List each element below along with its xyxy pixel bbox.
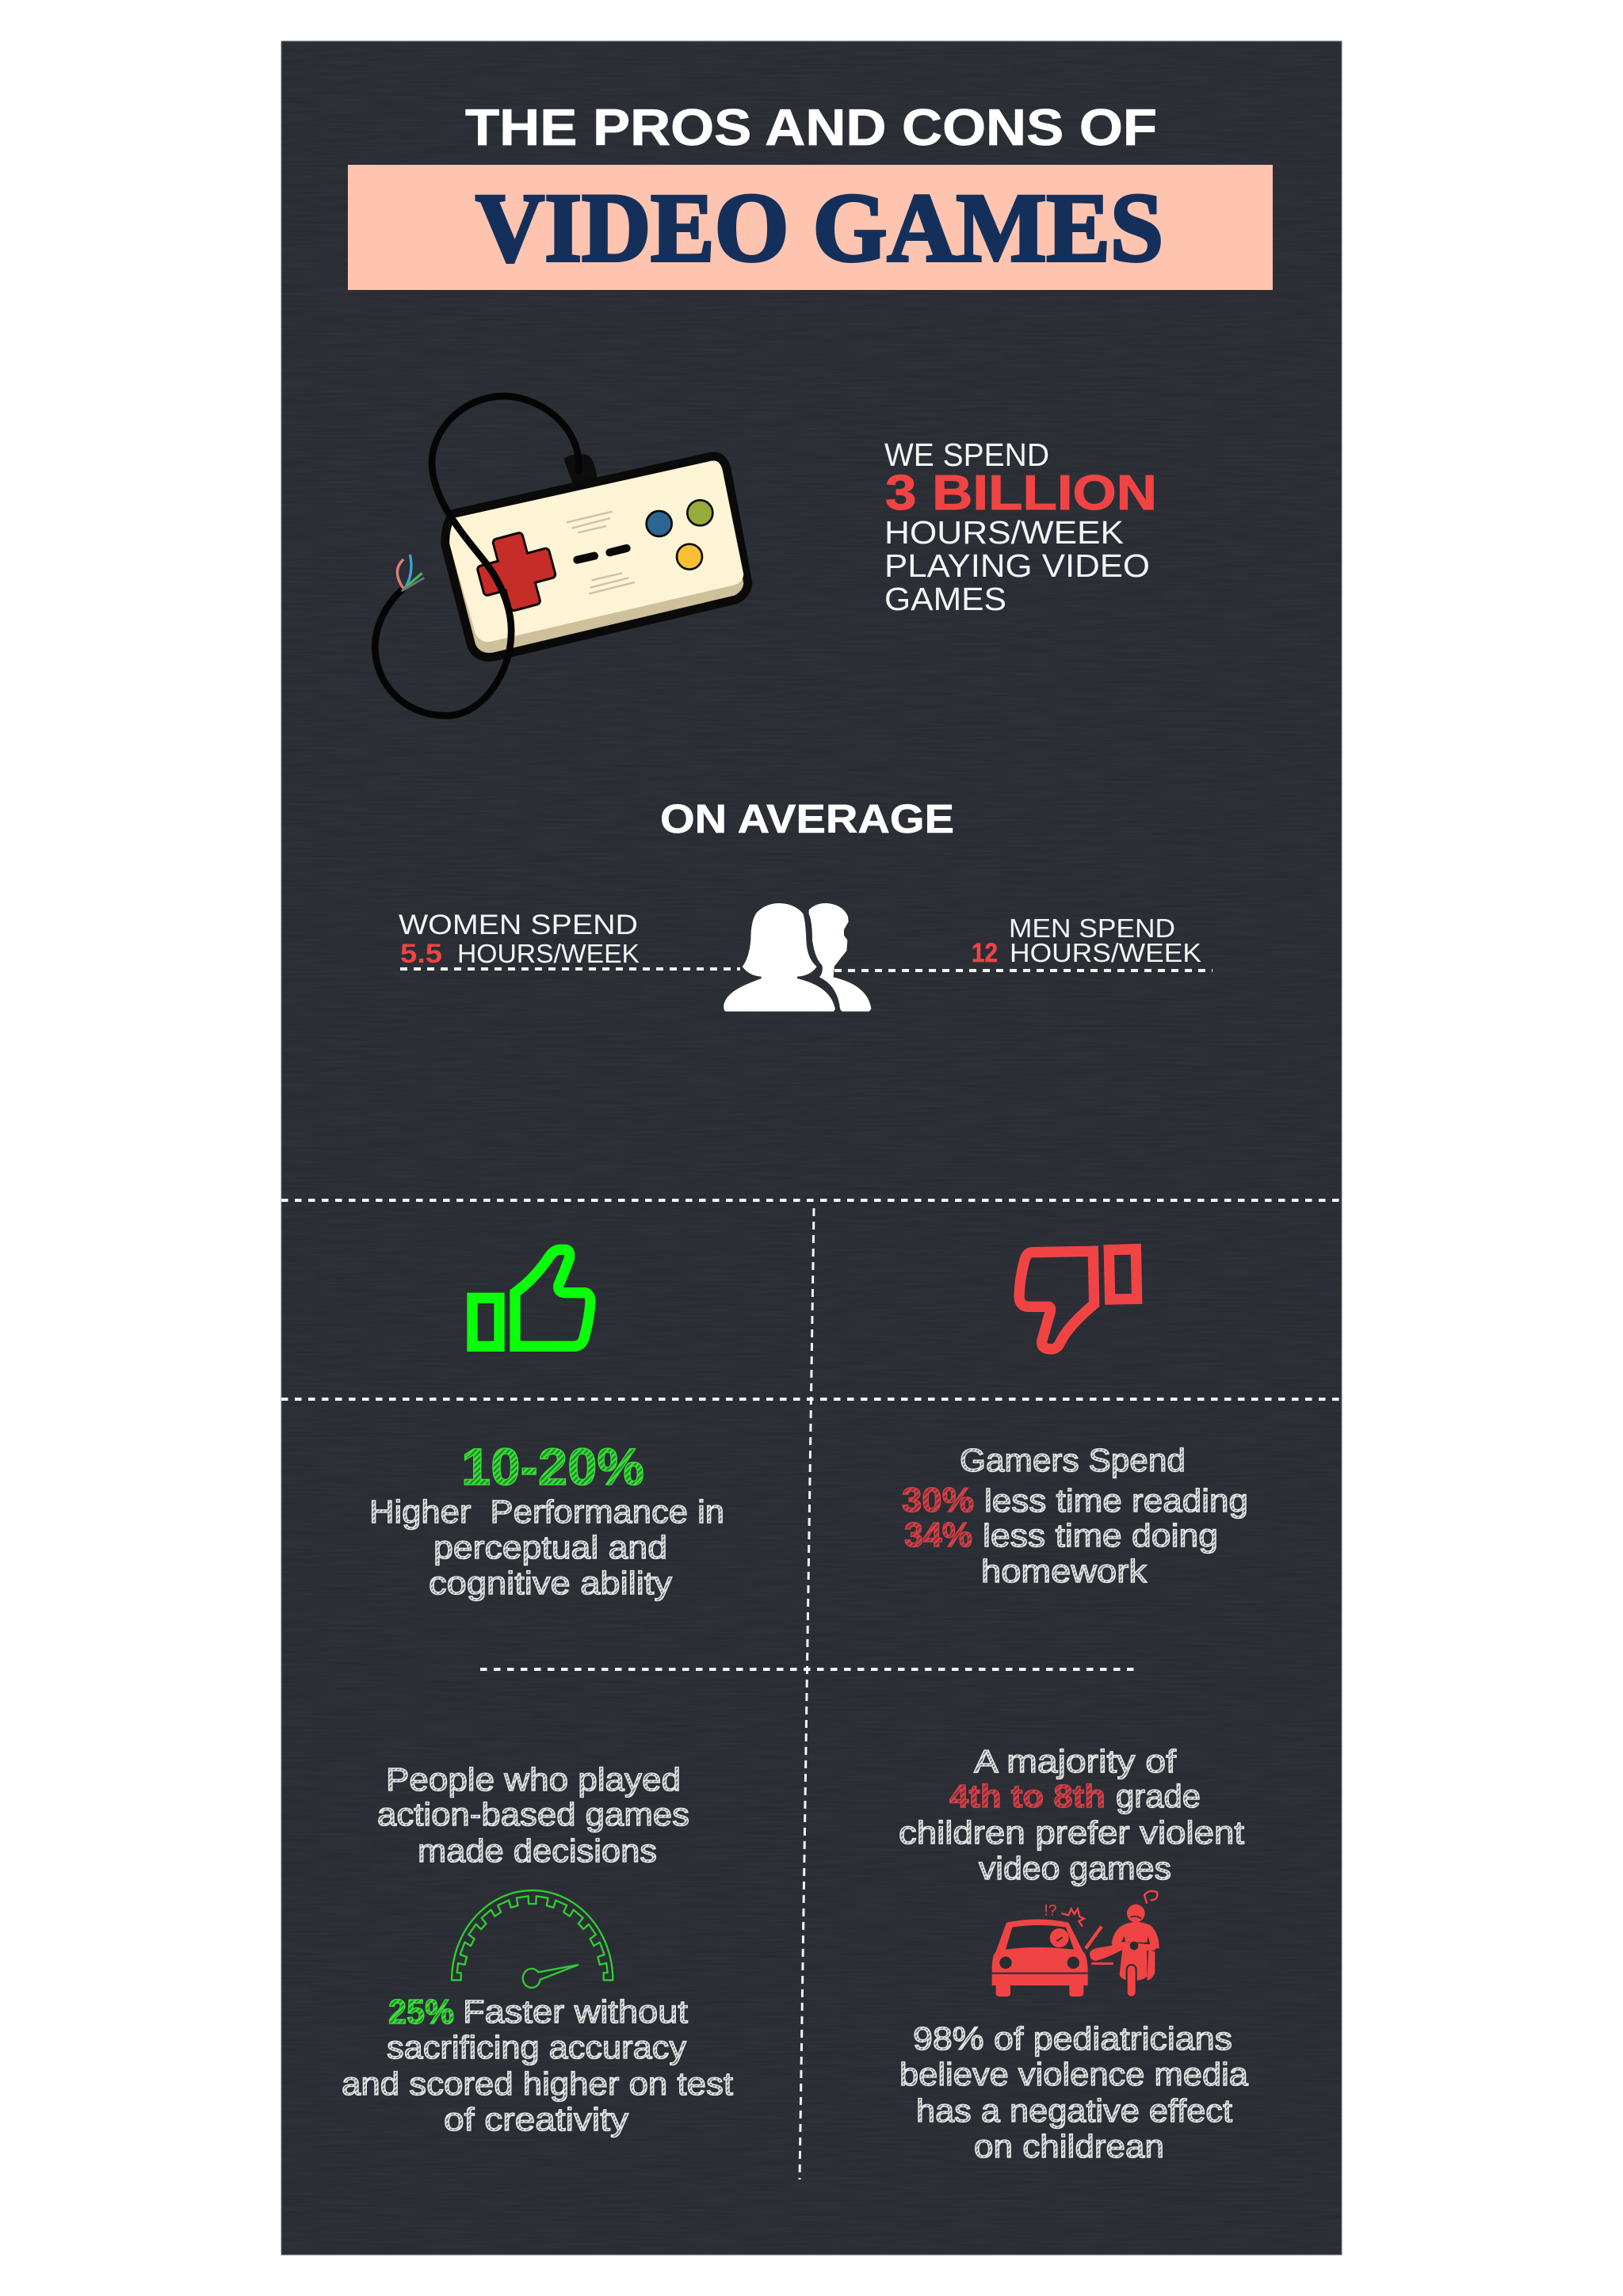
pro: 10-20% higher performance: cognitive ability: [429, 1565, 673, 1601]
stat: men spend: HOURS/WEEK: [1010, 938, 1201, 967]
pro: 25% faster: and scored higher on test: [342, 2065, 734, 2102]
con: gamers spend less time: 34%: [904, 1516, 972, 1554]
con: gamers spend less time: [902, 1442, 1248, 1589]
stat: men spend: [834, 913, 1212, 971]
con: gamers spend less time: less time reading: [984, 1482, 1248, 1519]
pro: 10-20% higher performance: Higher Performance in: [369, 1493, 724, 1530]
pro: 25% faster: sacrificing accuracy: [387, 2029, 687, 2065]
stat: men spend: MEN SPEND: [1009, 913, 1175, 943]
con: pediatricians stat: believe violence media: [899, 2056, 1248, 2092]
pro: action games decisions: made decisions: [418, 1833, 657, 1869]
icon: thumbs up: [472, 1249, 590, 1346]
stat: women spend: HOURS/WEEK: [457, 939, 640, 968]
con: violent game preference: [899, 1743, 1245, 1886]
pro: 25% faster: of creativity: [444, 2101, 629, 2138]
pro: 25% faster: [342, 1993, 734, 2138]
divider: lower horizontal dashed line: [480, 1668, 1136, 1671]
con: pediatricians stat: on childrean: [974, 2128, 1164, 2164]
icon: speedometer gauge: [452, 1890, 613, 1988]
con: violent game preference: A majority of: [974, 1743, 1177, 1779]
pro: 25% faster: Faster without: [463, 1993, 689, 2030]
con: gamers spend less time: less time doing: [983, 1517, 1218, 1554]
divider: upper horizontal dashed line: [281, 1199, 1342, 1202]
pro: 10-20% higher performance: [369, 1437, 724, 1601]
con: gamers spend less time: 30%: [902, 1481, 974, 1520]
title banner: video games: VIDEO GAMES: [475, 174, 1163, 282]
stat: 3 billion hours per week: PLAYING VIDEO: [884, 547, 1150, 584]
stat: 3 billion hours per week: HOURS/WEEK: [884, 514, 1124, 551]
con: violent game preference: children prefer violent: [899, 1814, 1245, 1851]
pro: 10-20% higher performance: perceptual and: [433, 1529, 667, 1566]
con: pediatricians stat: has a negative effect: [916, 2092, 1233, 2129]
icon: thumbs down: [1019, 1249, 1137, 1349]
stat: men spend: 12: [972, 938, 998, 968]
pro: action games decisions: action-based games: [377, 1796, 689, 1833]
stat: 3 billion hours per week: WE SPEND: [884, 437, 1049, 473]
con: violent game preference: grade: [1116, 1778, 1201, 1814]
icon: game controller with cut cable: [375, 396, 743, 715]
stat: 3 billion hours per week: [884, 437, 1157, 617]
icon: road rage car and motorcycle: [992, 1891, 1159, 1997]
divider: central vertical dashed line: [800, 1208, 814, 2180]
pro: action games decisions: People who played: [386, 1761, 681, 1798]
title: the pros and cons of: THE PROS AND CONS OF: [465, 98, 1157, 156]
icon: road rage car and motorcycle: !?: [1044, 1903, 1057, 1920]
stat: women spend: [399, 910, 740, 969]
stat: women spend: WOMEN SPEND: [399, 910, 638, 940]
dark chalkboard panel: [281, 41, 1342, 2255]
con: violent game preference: 4th to 8th: [949, 1778, 1106, 1814]
stat: women spend: 5.5: [400, 939, 442, 969]
con: gamers spend less time: Gamers Spend: [960, 1442, 1186, 1478]
title banner: video games: [348, 165, 1273, 290]
con: pediatricians stat: 98% of pediatricians: [913, 2020, 1232, 2057]
icon: woman and man silhouettes: [724, 903, 871, 1012]
pro: 25% faster: 25%: [388, 1993, 454, 2031]
stat: 3 billion hours per week: GAMES: [884, 581, 1006, 617]
con: pediatricians stat: [899, 2020, 1248, 2164]
heading: on average: ON AVERAGE: [660, 796, 954, 841]
con: gamers spend less time: homework: [981, 1553, 1148, 1589]
con: violent game preference: video games: [979, 1850, 1171, 1886]
pro: 10-20% higher performance: 10-20%: [461, 1437, 644, 1496]
pro: action games decisions: [377, 1761, 689, 1869]
divider: thumbs horizontal dashed line: [281, 1398, 1342, 1401]
stat: 3 billion hours per week: 3 BILLION: [885, 466, 1157, 521]
